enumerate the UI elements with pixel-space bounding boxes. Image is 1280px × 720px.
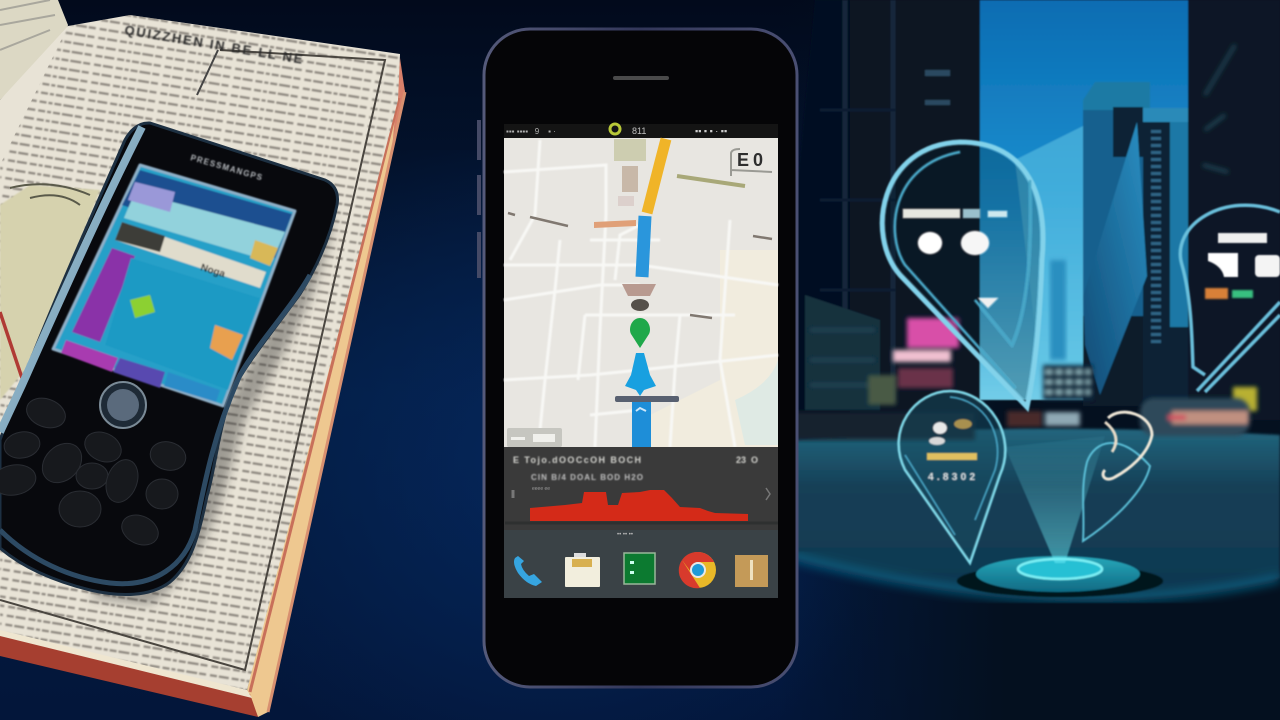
panel: paper road atlas <box>0 0 410 717</box>
street scene far lights <box>1007 365 1257 427</box>
atlas printed text lines <box>0 0 410 700</box>
map roads <box>504 140 778 447</box>
dock icon: green app <box>624 553 655 584</box>
car <box>1140 398 1250 436</box>
elevation panel: 23 O <box>736 455 758 465</box>
GPS screen: Noga <box>199 262 227 280</box>
neon shop signs <box>868 318 959 405</box>
left buildings <box>798 0 980 420</box>
app dock <box>504 530 778 598</box>
phone map screen <box>504 138 778 448</box>
map marker <box>622 284 656 311</box>
elevation panel: E Tojo.dOOCcOH BOCH <box>513 455 641 465</box>
atlas left page <box>0 0 68 100</box>
atlas page heading: QUIZZHEN IN BE LL NE <box>124 22 304 67</box>
heart pin <box>1083 412 1152 541</box>
phone status bar: ▪▪ ▪ ▪ · ▪▪ <box>695 126 727 136</box>
elevation panel: CIN B/4 DOAL BOD H2O <box>531 473 643 482</box>
phone status bar: 811 <box>632 126 646 136</box>
road <box>790 429 1280 598</box>
large pin <box>882 142 1043 407</box>
small pin <box>899 391 1005 563</box>
sky light wedge <box>1015 125 1085 370</box>
atlas right page <box>0 15 400 690</box>
hologram light beam <box>1005 436 1105 563</box>
panel: city street with holographic pins <box>790 0 1280 598</box>
map speed box: E0 <box>737 150 767 170</box>
green pin <box>630 318 650 348</box>
GPS orange icon <box>210 325 243 360</box>
GPS round button <box>100 382 146 428</box>
phone status bar: ▪▪▪ ▪▪▪▪ 9 ▪ · <box>506 127 556 136</box>
holograms <box>882 142 1280 597</box>
map scale button <box>507 428 562 447</box>
phone speaker <box>613 76 669 80</box>
elevation profile chart <box>530 490 748 521</box>
panel: smartphone with navigation app <box>479 29 797 687</box>
atlas cream page edge <box>247 56 405 717</box>
GPS device chrome edge <box>0 127 142 432</box>
hologram platform <box>957 556 1163 597</box>
phone body <box>484 29 797 687</box>
distant tower <box>1050 260 1066 360</box>
GPS device body <box>0 123 338 595</box>
blue arrow <box>625 353 656 396</box>
small pin: 4.8302 <box>928 472 975 483</box>
phone side buttons <box>477 120 481 278</box>
blue diagonal building face <box>1083 122 1147 395</box>
central towers <box>1083 82 1190 412</box>
GPS screen <box>53 165 295 406</box>
elevation panel: eeee ee <box>532 486 550 492</box>
shadow under handset <box>90 210 335 605</box>
GPS green icon <box>130 295 155 318</box>
GPS keypad <box>0 393 189 551</box>
GPS brand label: PRESSMANGPS <box>189 153 264 183</box>
app dock: •• •• •• <box>617 532 633 538</box>
route <box>647 139 666 213</box>
map speed box <box>731 149 772 176</box>
map building blocks <box>614 139 646 161</box>
atlas red spine band <box>0 634 258 717</box>
elevation panel <box>504 447 778 530</box>
dock icon: notes <box>565 553 600 587</box>
dock icon: browser <box>679 552 716 588</box>
right pin <box>1180 205 1280 392</box>
dock icon: phone <box>514 556 542 586</box>
atlas map inset <box>0 185 100 400</box>
right buildings <box>1188 0 1280 420</box>
dock icon: tan box <box>735 555 768 587</box>
phone status bar <box>504 124 778 138</box>
city sky <box>975 0 1190 400</box>
panel: handheld GPS device <box>0 123 338 595</box>
